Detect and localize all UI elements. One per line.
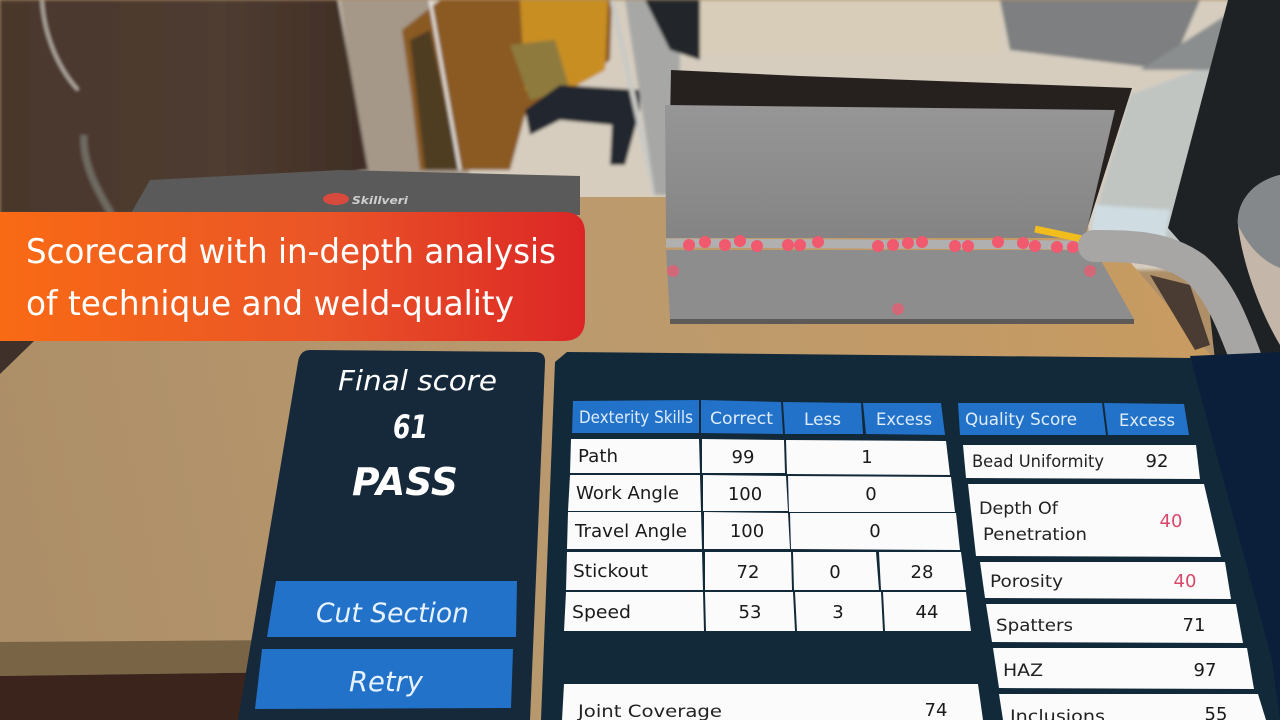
row: travel angle <box>567 512 960 550</box>
row: travel angle: 100 <box>730 521 764 542</box>
row: path: 99 <box>732 447 754 468</box>
defect markers <box>667 235 1096 315</box>
row: HAZ: HAZ <box>1003 661 1043 681</box>
row: speed: 53 <box>739 602 761 623</box>
row: depth of penetration: 40 <box>1160 511 1182 532</box>
row: spatters: 71 <box>1183 615 1205 636</box>
dexterity header: Excess <box>876 410 932 430</box>
row: porosity: 40 <box>1174 571 1196 592</box>
pass label: PASS <box>352 460 458 504</box>
dexterity header: Dexterity Skills <box>579 408 693 428</box>
button: retry <box>255 649 513 709</box>
row: HAZ <box>993 648 1254 689</box>
device: branded box <box>130 170 580 215</box>
row: bead uniformity <box>963 445 1200 479</box>
heading: final score: Final score <box>338 364 497 397</box>
table edge <box>0 640 300 676</box>
table top <box>0 197 1280 720</box>
row: stickout: Stickout <box>573 561 648 582</box>
row: path: Path <box>578 446 618 467</box>
black post on right <box>1168 0 1280 360</box>
button: cut section: Cut Section <box>316 598 469 629</box>
dark navy area right of the panel <box>1190 352 1280 720</box>
brand logo text: Skillveri <box>352 194 408 207</box>
weld bead <box>666 243 1085 245</box>
weld practice plate <box>665 70 1134 324</box>
row: stickout: 28 <box>911 562 933 583</box>
row: joint coverage <box>562 684 983 720</box>
panel: results <box>541 352 1280 720</box>
callout banner <box>0 212 585 341</box>
quality header: Excess <box>1119 411 1175 431</box>
room background <box>0 0 1280 270</box>
welding torch tip <box>1035 229 1092 241</box>
row: spatters <box>986 604 1243 643</box>
table: dexterity skills <box>564 400 971 631</box>
row: HAZ: 97 <box>1194 660 1216 681</box>
row: speed <box>564 592 971 631</box>
row: travel angle: 0 <box>869 521 881 542</box>
row: spatters: Spatters <box>996 616 1073 636</box>
row: stickout <box>566 552 966 590</box>
row: work angle: 0 <box>865 484 877 505</box>
row: stickout: 0 <box>829 562 841 583</box>
floor strip beneath table <box>0 672 300 720</box>
row: bead uniformity: Bead Uniformity <box>972 452 1104 472</box>
table: quality score <box>958 403 1266 720</box>
dexterity header <box>572 400 945 435</box>
row: path: 1 <box>861 447 873 468</box>
row: inclusions <box>999 694 1266 720</box>
row: bead uniformity: 92 <box>1146 451 1168 472</box>
quality header <box>958 403 1189 435</box>
welding torch hose <box>1094 246 1245 356</box>
callout text: of technique and weld-quality <box>26 284 514 324</box>
button: cut section <box>267 581 517 637</box>
metal gap behind hose <box>1150 275 1210 350</box>
row: work angle: 100 <box>728 484 762 505</box>
panel: final score <box>238 350 545 720</box>
score value: 61 <box>393 408 428 446</box>
row: depth of penetration <box>968 484 1221 557</box>
row: path <box>570 439 950 475</box>
cup <box>1238 175 1280 345</box>
row: speed: Speed <box>572 602 631 623</box>
row: porosity <box>980 562 1231 599</box>
row: depth of penetration: Penetration <box>983 525 1087 545</box>
quality header: Quality Score <box>965 410 1077 430</box>
row: speed: 44 <box>916 602 938 623</box>
row: speed: 3 <box>832 602 844 623</box>
callout text: Scorecard with in-depth analysis <box>26 232 556 272</box>
dexterity header: Correct <box>710 409 773 429</box>
callout text <box>26 232 556 324</box>
button: retry: Retry <box>349 665 423 698</box>
row: travel angle: Travel Angle <box>574 521 687 542</box>
row: work angle: Work Angle <box>576 483 679 504</box>
row: porosity: Porosity <box>990 572 1063 592</box>
row: work angle <box>568 475 955 512</box>
dark wedge below callout <box>0 341 34 374</box>
row: depth of penetration: Depth Of <box>979 499 1059 519</box>
dexterity header: Less <box>804 410 841 430</box>
row: stickout: 72 <box>737 562 759 583</box>
brand logo text <box>323 193 408 207</box>
